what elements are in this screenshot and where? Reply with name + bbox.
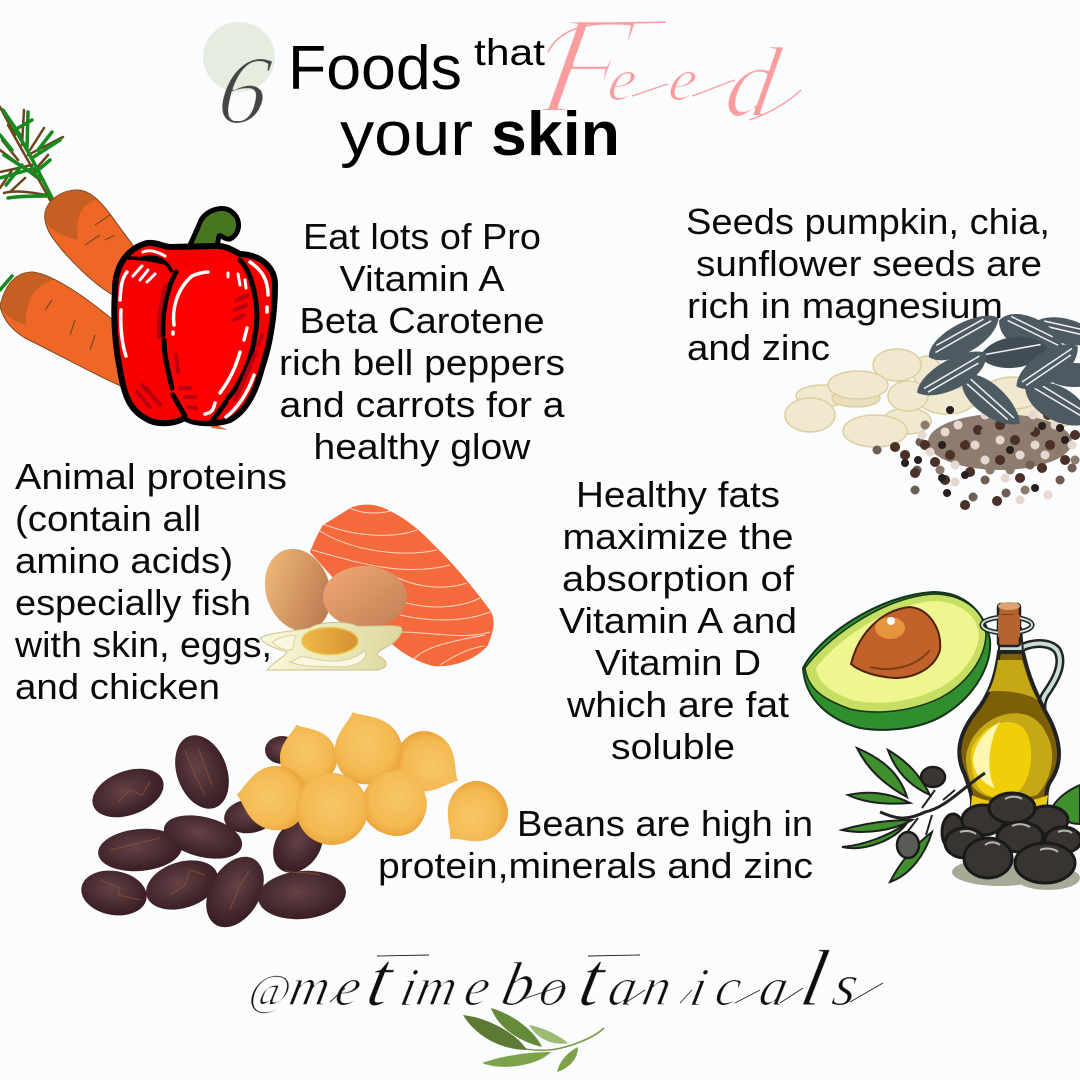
- text: seeds: Seeds pumpkin, chia,: [686, 201, 1050, 242]
- text: beans: protein,minerals and zinc: [378, 845, 813, 886]
- icon: olive branch: [842, 748, 1080, 882]
- text: healthy fats: absorption of: [562, 558, 795, 599]
- script handle text: m: [284, 957, 336, 1017]
- script word: Feed: ee: [604, 47, 737, 114]
- icon: carrots: [0, 107, 228, 430]
- text: pro vitamin A: Beta Carotene: [300, 300, 544, 341]
- icon: seeds pile: [785, 307, 1080, 505]
- text: seeds: rich in magnesium: [687, 285, 1003, 326]
- script handle text: a: [754, 957, 794, 1017]
- text: pro vitamin A: and carrots for a: [280, 384, 565, 425]
- script word: Feed: [529, 0, 801, 143]
- script handle text: c: [710, 957, 747, 1017]
- text: animal proteins: [14, 456, 287, 707]
- script handle text: m: [411, 957, 463, 1017]
- text: animal proteins: (contain all: [15, 498, 201, 539]
- text: pro vitamin A: rich bell peppers: [279, 342, 565, 383]
- text: pro vitamin A: healthy glow: [314, 426, 531, 467]
- text: beans: Beans are high in: [517, 803, 813, 844]
- script handle text: b: [496, 950, 542, 1019]
- script handle text: t: [360, 937, 402, 1023]
- icon: leaf sprig: [463, 1008, 604, 1072]
- text: pro vitamin A: Eat lots of Pro: [303, 216, 541, 257]
- text: healthy fats: [559, 474, 797, 767]
- script word: Feed: d: [718, 27, 788, 138]
- script handle text: s: [827, 953, 864, 1019]
- script handle text: n: [637, 957, 677, 1017]
- script handle text: i: [685, 957, 713, 1017]
- script handle text: e: [459, 957, 496, 1017]
- icon: olive oil bottle: [959, 602, 1060, 815]
- icon: dark beans: [78, 728, 348, 937]
- text: healthy fats: Vitamin D: [595, 642, 761, 683]
- icon: avocado: [803, 592, 990, 730]
- text: healthy fats: Healthy fats: [576, 474, 780, 515]
- title: [203, 0, 801, 169]
- text: seeds: sunflower seeds are: [696, 243, 1042, 284]
- text: animal proteins: and chicken: [15, 666, 220, 707]
- text: healthy fats: maximize the: [562, 516, 794, 557]
- handle: [243, 935, 883, 1023]
- script handle text: i: [395, 957, 423, 1017]
- script flourishes: [330, 955, 883, 1003]
- title word: your: your: [340, 100, 473, 169]
- text: animal proteins: with skin, eggs,: [14, 624, 272, 665]
- icon: red bell pepper: [114, 209, 275, 423]
- title word: that: that: [474, 32, 546, 73]
- text: seeds: and zinc: [687, 327, 830, 368]
- text: healthy fats: which are fat: [566, 684, 789, 725]
- chia seeds: [928, 414, 1072, 470]
- fried egg: [260, 622, 402, 670]
- eggs: [255, 540, 341, 640]
- script handle text: t: [572, 937, 614, 1023]
- script handle text: a: [603, 957, 643, 1017]
- title word: Foods: Foods: [288, 34, 462, 103]
- text: animal proteins: especially fish: [15, 582, 251, 623]
- text: animal proteins: Animal proteins: [15, 456, 287, 497]
- text: seeds: [686, 201, 1050, 368]
- icon: black olives: [942, 793, 1080, 890]
- script handle text: l: [794, 935, 835, 1023]
- title word: skin: skin: [491, 100, 620, 169]
- script handle text: e: [330, 957, 367, 1017]
- text: healthy fats: Vitamin A and: [559, 600, 797, 641]
- text: beans: [378, 803, 813, 886]
- text: animal proteins: amino acids): [15, 540, 233, 581]
- text: healthy fats: soluble: [611, 726, 735, 767]
- icon: chickpeas: [234, 700, 519, 860]
- icon: salmon and eggs: [255, 505, 494, 670]
- pumpkin seeds: [785, 349, 1077, 447]
- script handle text: o: [534, 957, 574, 1017]
- script handle text: @: [245, 965, 296, 1015]
- text: pro vitamin A: [279, 216, 565, 467]
- icon: green circle behind number: [203, 22, 275, 92]
- text: pro vitamin A: Vitamin A: [340, 258, 505, 299]
- script number 6: 6: [210, 37, 278, 145]
- sunflower seeds: [910, 307, 1080, 435]
